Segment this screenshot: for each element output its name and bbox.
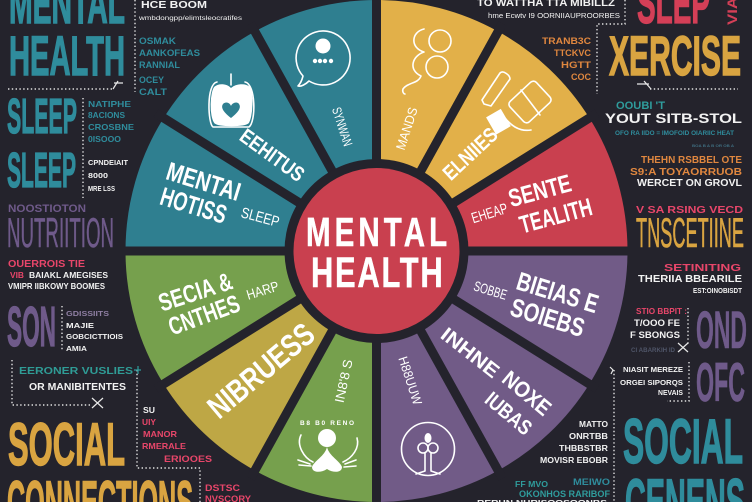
wedge purple three bbox=[376, 251, 498, 502]
sleep notes: 0ISOOO bbox=[88, 134, 121, 144]
right notes block: S9:A TOYAORRUOB bbox=[630, 167, 742, 178]
wedge teal lower bbox=[126, 118, 376, 251]
right notes block: BOA B A B OR OB A bbox=[692, 143, 734, 148]
right notes block bbox=[605, 100, 743, 216]
right notes block: OFO RA IIDO = IMOFOID OIARIIC HEAT bbox=[615, 131, 734, 137]
wedge green lower bbox=[255, 251, 376, 502]
sleep notes: MRE LSS bbox=[88, 184, 115, 193]
left column: sleep headings bbox=[7, 90, 77, 198]
son notes: GOBCICTTIOIS bbox=[66, 332, 123, 341]
bottom left notes: DSTSC bbox=[205, 483, 241, 493]
yellow labels: ELNIIES bbox=[439, 123, 503, 185]
bottom left notes: RMERALE bbox=[142, 441, 186, 451]
left middle notes: BAIAKL AMEGISES bbox=[29, 270, 108, 280]
son notes bbox=[66, 309, 123, 353]
right middle notes: ORGEI SIPORQS bbox=[620, 378, 683, 387]
purple labels: IUBAS bbox=[480, 388, 536, 440]
green and olive labels: CNTHES bbox=[165, 290, 244, 341]
sleep notes: NATIPHE bbox=[88, 99, 131, 109]
bottom left notes: UIY bbox=[142, 417, 156, 427]
right notes block: OOUBI 'T bbox=[616, 100, 665, 112]
top left notes: CALT bbox=[139, 87, 167, 98]
right notes block: WERCET ON GROVL bbox=[637, 178, 742, 189]
wedge green upper bbox=[126, 251, 376, 384]
green and olive labels: NIBRUESS bbox=[200, 316, 322, 426]
dotted box callout bbox=[19, 366, 133, 393]
right middle notes: NEVAIS bbox=[658, 388, 683, 397]
top right notes bbox=[477, 0, 620, 83]
yellow labels: MANDS bbox=[393, 105, 421, 152]
left column: mental health heading bbox=[9, 0, 125, 87]
red labels: EHEAP bbox=[470, 200, 510, 227]
son notes: MAJIE bbox=[66, 321, 94, 330]
wedge labels bbox=[155, 105, 602, 440]
teal labels: MENTAI bbox=[163, 156, 244, 207]
infographic: SLEEP bbox=[7, 144, 76, 198]
sleep notes: CROSBNE bbox=[88, 122, 134, 132]
icon: speech bubble with figure bbox=[296, 31, 350, 86]
left column: mental health heading: HEALTH bbox=[9, 24, 125, 87]
hub circle bbox=[294, 168, 460, 334]
social connections heading bbox=[7, 411, 193, 502]
teal labels bbox=[157, 105, 356, 231]
right middle notes: THERIIA BBEARILE bbox=[638, 274, 742, 285]
top right notes: TTCKVC bbox=[554, 48, 591, 59]
top left notes: RANNIAL bbox=[139, 60, 180, 71]
red labels: SENTE bbox=[505, 169, 574, 213]
sleep notes bbox=[88, 99, 134, 193]
wedge olive bbox=[164, 251, 376, 470]
teal labels: SLEEP bbox=[239, 204, 281, 231]
top right notes: TRANB3C bbox=[542, 36, 591, 47]
green and olive labels: HARP bbox=[244, 278, 281, 303]
teal labels: SYNWAN bbox=[329, 105, 356, 148]
wheel bbox=[120, 0, 632, 502]
bottom right notes: FF MVO bbox=[515, 480, 548, 489]
icon: apple with heart bbox=[209, 74, 254, 127]
purple labels: H88UUW bbox=[395, 355, 425, 407]
right notes block: V SA RSING VECD bbox=[636, 205, 743, 216]
icon: meditation figure: B8 B0 RENO bbox=[300, 420, 354, 427]
right notes block: THEHN RSBBEL OTE bbox=[641, 155, 742, 166]
right middle notes: T/OOO FE bbox=[634, 318, 680, 328]
right middle notes: F SBONGS bbox=[630, 330, 680, 340]
wedge yellow one bbox=[376, 0, 498, 251]
right notes block: YOUT SITB-STOL bbox=[605, 110, 743, 126]
left middle notes: VMIPR IIBKOWY BOOMES bbox=[8, 281, 105, 291]
right middle notes: CI ABARKIH ID bbox=[631, 347, 675, 354]
green and olive labels bbox=[155, 267, 356, 426]
arrows and crosses bbox=[92, 81, 688, 408]
sleep heading right: VIA bbox=[724, 0, 740, 25]
green and olive labels: SECIA & bbox=[155, 267, 236, 317]
social connections heading: SOCIAL bbox=[8, 411, 125, 478]
nutrition heading bbox=[7, 203, 114, 256]
bottom right notes: OKONHOS RARIBOF bbox=[519, 489, 611, 499]
bottom right notes bbox=[477, 420, 611, 502]
top left notes: OCEY bbox=[139, 75, 165, 86]
bottom right notes: MEIWO bbox=[573, 477, 610, 487]
purple labels: SOBBE bbox=[472, 278, 509, 303]
sleep notes: CPNDEIAIT bbox=[88, 158, 128, 167]
right middle notes: EST:OINOBISDT bbox=[693, 288, 743, 295]
bottom left notes: SU bbox=[143, 405, 155, 415]
son notes: AMIA bbox=[66, 344, 88, 353]
icon: meditation figure bbox=[298, 420, 358, 472]
wedge teal upper bbox=[255, 0, 376, 251]
wedge teal middle bbox=[164, 32, 376, 251]
left middle notes: OUERROIS TIE bbox=[8, 259, 85, 270]
top left notes: AANKOFEAS bbox=[139, 48, 200, 59]
purple labels: INHNE bbox=[436, 324, 503, 383]
nutrition heading: NOOSTIOTON bbox=[8, 203, 86, 215]
top right notes: HGTT bbox=[561, 60, 591, 71]
infographic: NUTRIITION bbox=[7, 209, 114, 256]
bottom right notes: ONRTBB bbox=[569, 432, 608, 441]
bottom left notes: ERIOOES bbox=[164, 454, 212, 465]
yellow labels bbox=[393, 105, 503, 185]
icon: person in circle bbox=[402, 422, 454, 476]
top left notes: wmbdongpp/elimtsleocratifes bbox=[138, 15, 243, 22]
red labels: TEALITH bbox=[517, 193, 595, 239]
purple labels: SOIEBS bbox=[507, 292, 588, 343]
bottom right notes: MATTO bbox=[579, 420, 608, 429]
bottom right notes: THBBSTBR bbox=[559, 444, 608, 453]
top left notes bbox=[138, 0, 243, 98]
son notes: GDISSIITS bbox=[66, 309, 109, 318]
purple labels: BIEIAS E bbox=[513, 266, 602, 319]
ond ofc headings bbox=[696, 301, 747, 413]
hub title bbox=[306, 209, 447, 296]
right middle notes: STIO BBPIT : bbox=[636, 306, 687, 316]
dotted box callout: OR MANIBITENTES bbox=[29, 382, 126, 393]
bottom left notes: MANOR bbox=[143, 429, 177, 439]
left middle notes: VIB bbox=[10, 270, 24, 280]
top right notes: hme Ecwtv I9 OORNIIAUPROORBES bbox=[488, 13, 620, 20]
green and olive labels: IN8'8 S bbox=[332, 358, 356, 404]
top left notes: OSMAK bbox=[139, 36, 176, 47]
right middle notes: SETINITING bbox=[664, 263, 741, 274]
right middle notes: NIASIT MEREZE bbox=[623, 365, 683, 374]
top right notes: COC bbox=[571, 72, 591, 83]
bottom right notes: MOVISR EBOBR bbox=[540, 456, 608, 465]
hub title: HEALTH bbox=[311, 248, 443, 296]
wedge red bbox=[376, 118, 628, 251]
teal labels: EEHITUS bbox=[235, 125, 309, 187]
sleep notes: 8000 bbox=[88, 171, 108, 180]
bottom left notes bbox=[142, 405, 251, 502]
icon: pencil and notebook bbox=[482, 72, 553, 135]
infographic: SON bbox=[7, 295, 56, 359]
sleep notes: 8ACIONS bbox=[88, 110, 125, 120]
hub title: MENTAL bbox=[306, 209, 447, 255]
icon: linked loops bbox=[403, 29, 451, 94]
red labels bbox=[470, 169, 595, 239]
teal labels: HOTISS bbox=[157, 181, 231, 230]
purple labels bbox=[395, 266, 602, 440]
wedge yellow two bbox=[376, 32, 589, 251]
wedge purple one bbox=[376, 251, 628, 384]
infographic: SLEEP bbox=[7, 90, 77, 144]
left middle notes bbox=[8, 259, 108, 291]
wedge purple two bbox=[376, 251, 589, 470]
right middle notes bbox=[620, 263, 743, 397]
dotted box callout: EERONER VUSLIES bbox=[19, 366, 133, 377]
purple labels: NOXE bbox=[497, 366, 556, 421]
